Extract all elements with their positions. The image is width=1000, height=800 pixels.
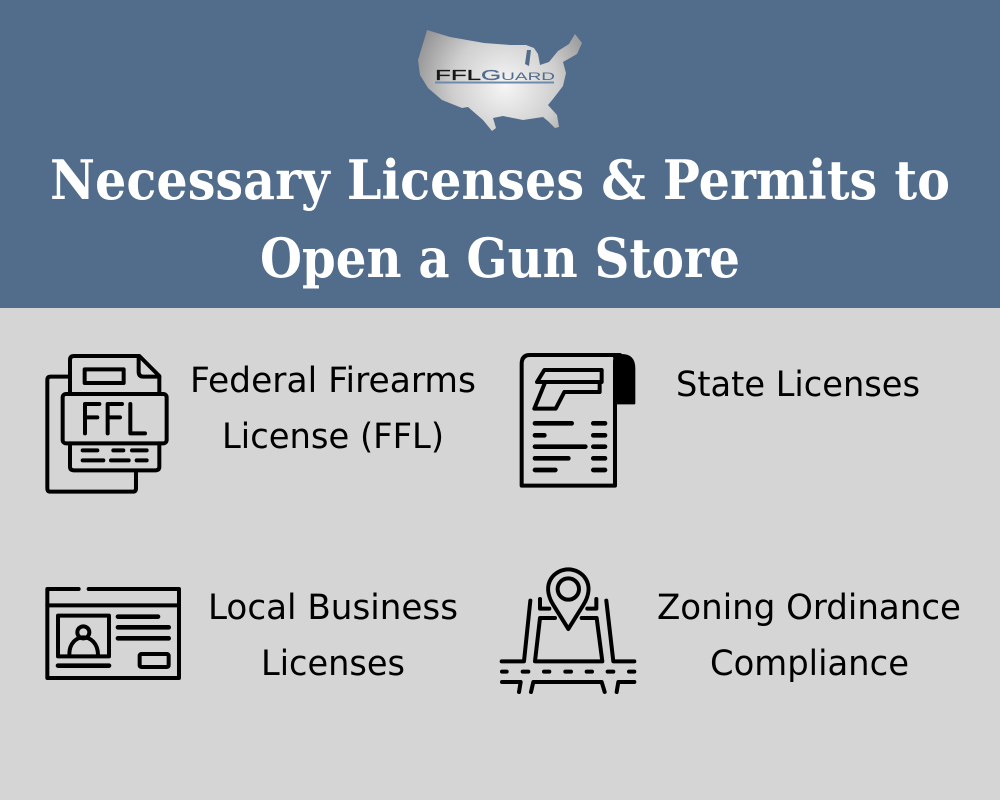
paper curl bbox=[613, 355, 634, 403]
logo underline bbox=[435, 82, 554, 84]
logo wordmark: FFL G UARD bbox=[435, 67, 555, 84]
label: Zoning Ordinance Compliance: Zoning Ordinance bbox=[657, 588, 961, 628]
label: Federal Firearms License: Federal Firearms bbox=[190, 361, 476, 401]
label: Local Business Licenses: Licenses bbox=[261, 644, 405, 684]
title bbox=[50, 148, 950, 290]
label: Federal Firearms License: License (FFL) bbox=[222, 417, 444, 457]
label: State Licenses: State Licenses bbox=[676, 365, 920, 405]
icon: FFL document bbox=[47, 356, 167, 492]
logo lake notch bbox=[525, 50, 531, 66]
logo: FFL Guard US map bbox=[418, 30, 582, 131]
label: Local Business Licenses: Local Business bbox=[208, 588, 458, 628]
item: State Licenses bbox=[522, 355, 920, 486]
header band bbox=[0, 0, 1000, 308]
label: Federal Firearms License bbox=[190, 361, 476, 457]
icon: gun permit paper bbox=[522, 355, 634, 486]
item: Federal Firearms License bbox=[47, 356, 476, 492]
label: Zoning Ordinance Compliance: Compliance bbox=[710, 644, 909, 684]
item: Local Business Licenses bbox=[47, 588, 458, 684]
icon: business license card bbox=[47, 589, 179, 678]
item: Zoning Ordinance Compliance bbox=[502, 569, 961, 692]
logo map silhouette bbox=[418, 30, 582, 131]
label: Zoning Ordinance Compliance bbox=[657, 588, 961, 684]
title: Open a Gun Store bbox=[260, 226, 740, 290]
label: Local Business Licenses bbox=[208, 588, 458, 684]
icon: map pin on road bbox=[502, 569, 634, 692]
